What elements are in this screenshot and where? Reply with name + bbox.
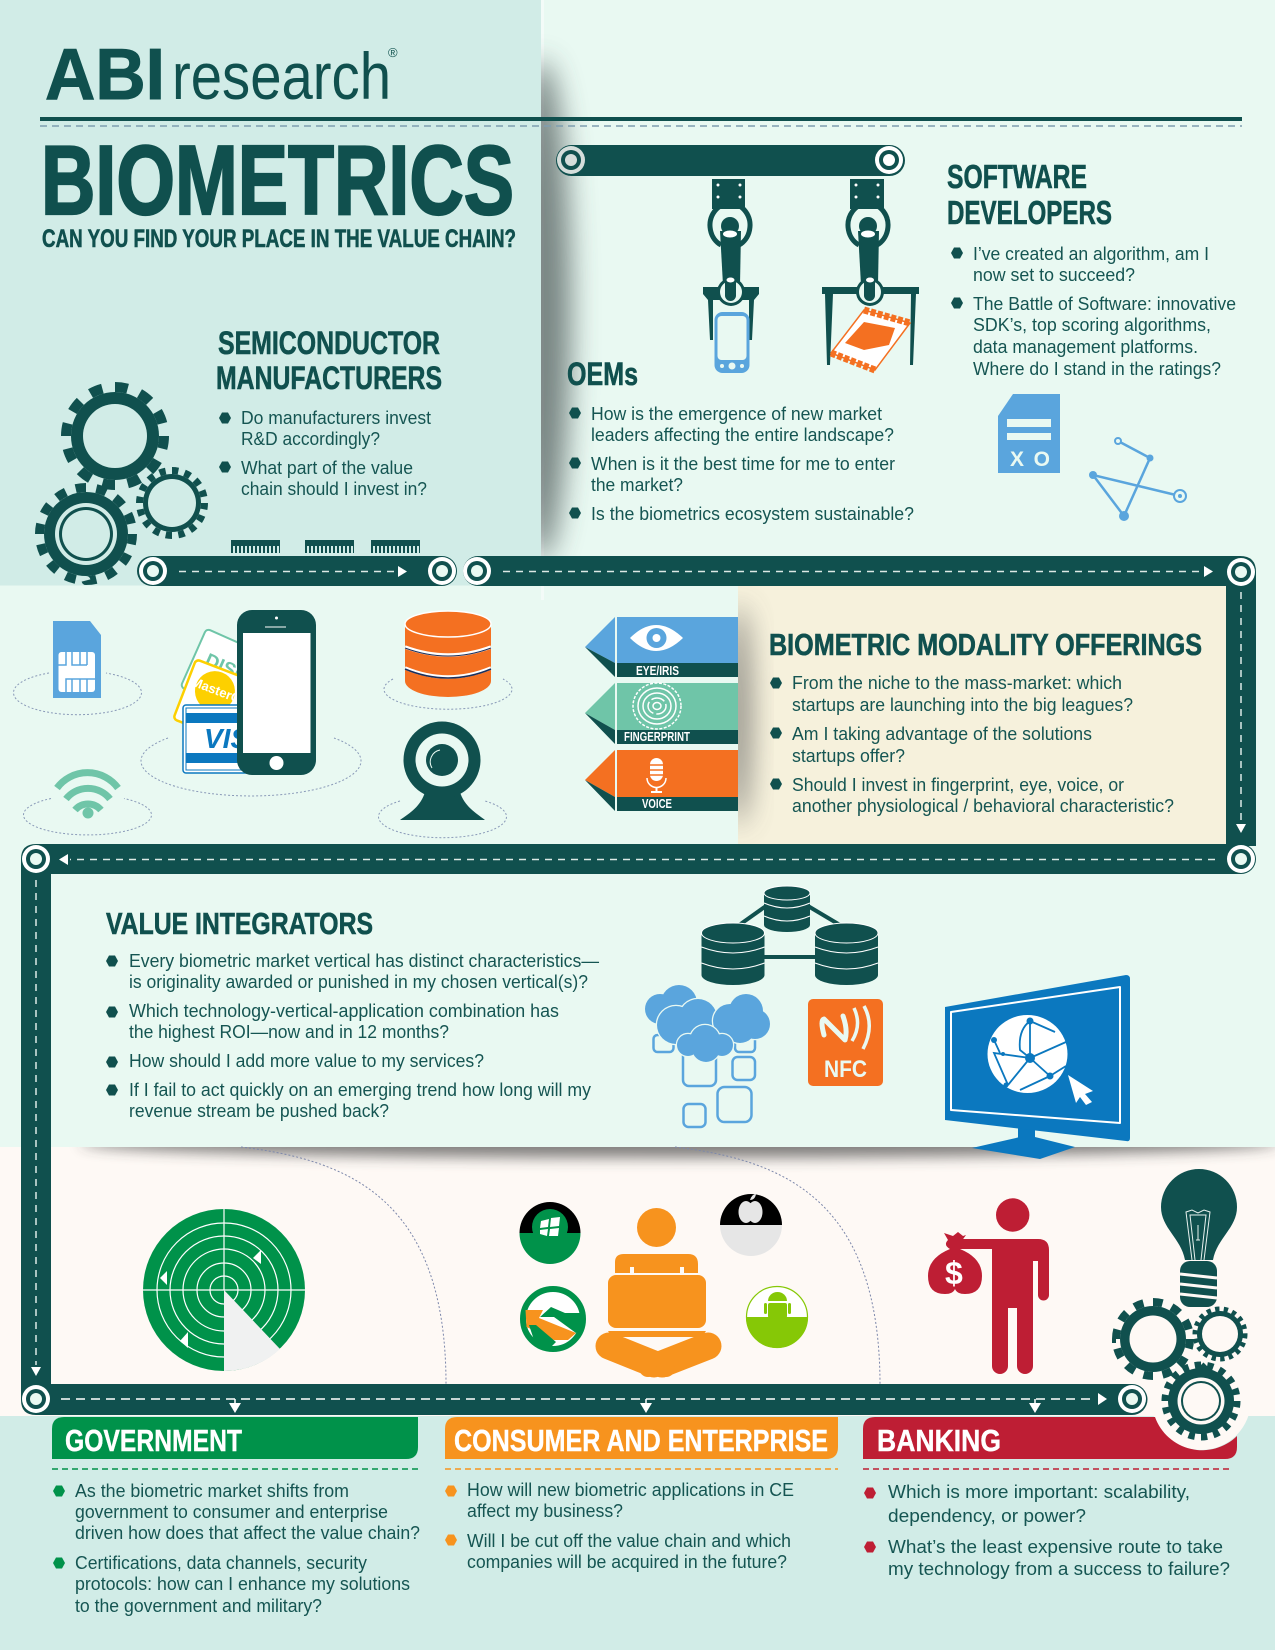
icon: android logo	[746, 1286, 808, 1348]
text block: government bullets	[53, 1481, 420, 1616]
icon: person with laptop	[608, 1208, 708, 1377]
text block: OEM bullets	[569, 404, 914, 524]
icon: orange database	[384, 611, 512, 709]
heading: semiconductor manufacturers: MANUFACTURERS	[216, 360, 442, 396]
conveyor wheels	[22, 557, 1255, 1413]
tab: banking: BANKING	[877, 1423, 1001, 1458]
text block: value integrators bullets: Every biometric market vertical has distinct characteristics—	[129, 951, 599, 971]
text block: value integrators bullets: If I fail to act quickly on an emerging trend how long will my	[129, 1080, 591, 1100]
text block: modality bullets: another physiological / behavioral characteristic?	[792, 796, 1174, 816]
text block: software bullets: now set to succeed?	[973, 265, 1135, 285]
text block: value integrators bullets: How should I add more value to my services?	[129, 1051, 484, 1071]
icon: person with money bag	[928, 1198, 1049, 1374]
text block: government bullets: As the biometric market shifts from	[75, 1481, 349, 1501]
text block: banking bullets: What’s the least expensive route to take	[888, 1537, 1223, 1557]
text block: semiconductor bullets: What part of the value	[241, 458, 413, 478]
text block: government bullets: to the government and military?	[75, 1596, 322, 1616]
text block: software bullets: SDK’s, top scoring algorithms,	[973, 315, 1211, 335]
tab: government: GOVERNMENT	[65, 1423, 242, 1458]
logo: ABI research: ABI	[45, 35, 165, 115]
icon: radar	[143, 1209, 305, 1371]
icon: NFC tag: NFC	[824, 1056, 867, 1083]
dashed arcs	[241, 1147, 880, 1385]
logo: ABI research	[45, 35, 398, 115]
title: BIOMETRICS	[41, 125, 514, 235]
heading: value integrators: VALUE INTEGRATORS	[106, 906, 373, 941]
text block: modality bullets: From the niche to the mass-market: which	[792, 673, 1122, 693]
heading: semiconductor manufacturers	[216, 325, 442, 396]
tag: voice: VOICE	[642, 796, 672, 811]
text block: consumer and enterprise bullets: How will new biometric applications in CE	[467, 1480, 794, 1500]
text block: software bullets: The Battle of Software: innovative	[973, 294, 1236, 314]
heading: software developers: SOFTWARE	[947, 158, 1087, 195]
icon: gears left	[40, 387, 204, 580]
white cutout behind gear	[1151, 1350, 1251, 1450]
logo: ABI research: research	[172, 39, 391, 113]
text block: semiconductor bullets: chain should I invest in?	[241, 479, 427, 499]
icon: algorithm network	[1089, 438, 1186, 521]
text block: value integrators bullets	[106, 951, 599, 1121]
text block: OEM bullets: the market?	[591, 475, 683, 495]
icon: memory chips	[231, 540, 420, 550]
text block: OEM bullets: leaders affecting the entire landscape?	[591, 425, 894, 445]
tab: consumer and enterprise	[445, 1417, 838, 1469]
text block: value integrators bullets: Which technology-vertical-application combination has	[129, 1001, 559, 1021]
text block: banking bullets	[864, 1482, 1230, 1579]
heading: software developers: DEVELOPERS	[947, 194, 1112, 231]
tag: eye / iris: EYE/IRIS	[636, 663, 679, 678]
icon: SIM card	[14, 621, 141, 715]
text block: government bullets: driven how does that affect the value chain?	[75, 1523, 420, 1543]
logo: ABI research: ®	[388, 45, 398, 60]
text block: banking bullets: my technology from a success to failure?	[888, 1559, 1230, 1579]
text block: government bullets: government to consumer and enterprise	[75, 1502, 388, 1522]
text block: modality bullets: Am I taking advantage of the solutions	[792, 724, 1092, 744]
text block: software bullets: data management platforms.	[973, 337, 1198, 357]
icon: wifi	[24, 773, 151, 835]
tab: government	[52, 1417, 419, 1469]
text block: software bullets: Where do I stand in the ratings?	[973, 359, 1221, 379]
icon: NFC tag	[808, 999, 883, 1086]
tag: eye / iris	[585, 617, 738, 678]
text block: value integrators bullets: the highest ROI—now and in 12 months?	[129, 1022, 449, 1042]
text block: banking bullets: Which is more important: scalability,	[888, 1482, 1190, 1502]
heading: software developers	[947, 158, 1112, 231]
text block: value integrators bullets: revenue stream be pushed back?	[129, 1101, 389, 1121]
icon: database cluster	[702, 886, 878, 985]
text block: value integrators bullets: is originality awarded or punished in my chosen vertical(s)?	[129, 972, 588, 992]
icon: code file	[998, 394, 1060, 473]
icon: apple logo	[720, 1194, 782, 1256]
text block: consumer and enterprise bullets: Will I be cut off the value chain and which	[467, 1531, 791, 1551]
text block: banking bullets: dependency, or power?	[888, 1506, 1086, 1526]
subtitle: CAN YOU FIND YOUR PLACE IN THE VALUE CHAIN?	[42, 225, 516, 253]
text block: modality bullets: Should I invest in fingerprint, eye, voice, or	[792, 775, 1124, 795]
text block: modality bullets: startups are launching into the big leagues?	[792, 695, 1133, 715]
icon: windows logo	[520, 1202, 580, 1264]
tag: voice	[585, 750, 738, 811]
text block: semiconductor bullets: R&D accordingly?	[241, 429, 380, 449]
conveyor belt path	[21, 556, 1256, 1415]
text block: semiconductor bullets	[219, 408, 431, 499]
icon: smartphone with payment cards: MasterCard	[189, 674, 262, 713]
text block: OEM bullets: When is it the best time for me to enter	[591, 454, 895, 474]
icon: cloud with app squares	[645, 985, 770, 1127]
text block: consumer and enterprise bullets: affect my business?	[467, 1501, 623, 1521]
text block: consumer and enterprise bullets	[445, 1480, 794, 1572]
text block: OEM bullets: Is the biometrics ecosystem sustainable?	[591, 504, 914, 524]
tab: banking	[863, 1417, 1237, 1469]
icon: handshake	[523, 1289, 583, 1350]
icon: webcam	[378, 722, 506, 838]
text block: government bullets: protocols: how can I enhance my solutions	[75, 1574, 410, 1594]
text block: modality bullets	[770, 673, 1174, 816]
text block: semiconductor bullets: Do manufacturers invest	[241, 408, 431, 428]
text block: consumer and enterprise bullets: companies will be acquired in the future?	[467, 1552, 787, 1572]
tag: fingerprint	[585, 683, 738, 744]
panel: biometric modality offerings background	[726, 586, 1227, 844]
text block: OEM bullets: How is the emergence of new market	[591, 404, 882, 424]
icon: smartphone with payment cards	[141, 610, 361, 796]
heading: semiconductor manufacturers: SEMICONDUCTOR	[218, 325, 440, 361]
heading: OEMs: OEMs	[567, 356, 638, 392]
icon: light bulb and gears	[1116, 1169, 1245, 1437]
icon: smartphone with payment cards: VIS	[204, 723, 249, 754]
icon: code file: XO	[1010, 448, 1050, 471]
text block: software bullets: I’ve created an algorithm, am I	[973, 244, 1209, 264]
text block: software bullets	[951, 244, 1236, 379]
text block: modality bullets: startups offer?	[792, 746, 905, 766]
icon: smartphone with payment cards: DISCOVER	[202, 650, 301, 710]
icon: robot arm conveyor	[556, 145, 919, 373]
icon: monitor with globe	[945, 975, 1130, 1159]
header rule	[40, 117, 1242, 126]
icon: person with money bag: $	[945, 1255, 963, 1291]
tag: fingerprint: FINGERPRINT	[624, 729, 690, 744]
text block: government bullets: Certifications, data channels, security	[75, 1553, 367, 1573]
tab: consumer and enterprise: CONSUMER AND ENTERPRISE	[454, 1423, 828, 1458]
